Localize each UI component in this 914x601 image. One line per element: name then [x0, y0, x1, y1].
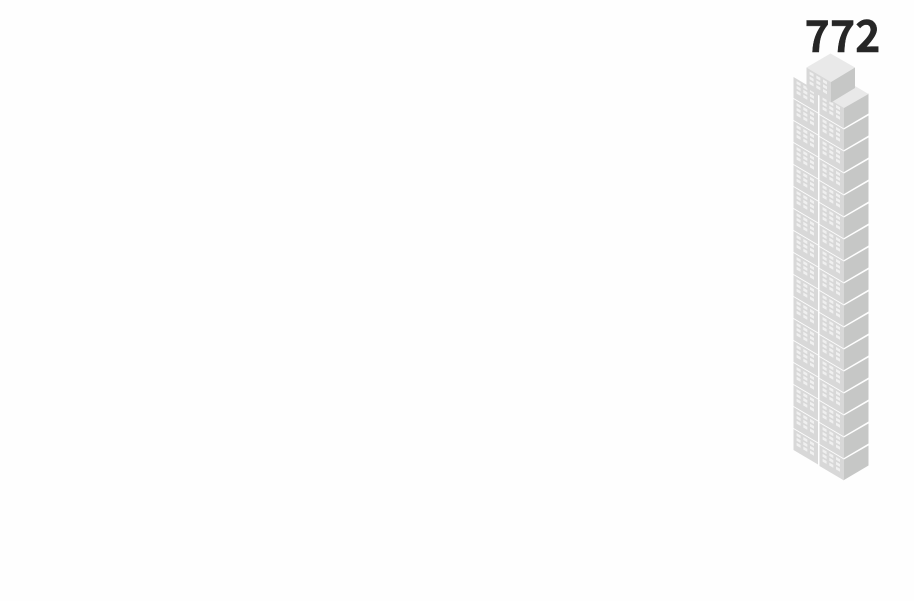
right column of building blocks — [820, 80, 868, 480]
icon: isometric building tower — [794, 54, 868, 480]
title: number 772: 772 — [804, 1, 880, 65]
left column of building blocks — [794, 77, 818, 464]
top block of the tower — [806, 54, 855, 102]
